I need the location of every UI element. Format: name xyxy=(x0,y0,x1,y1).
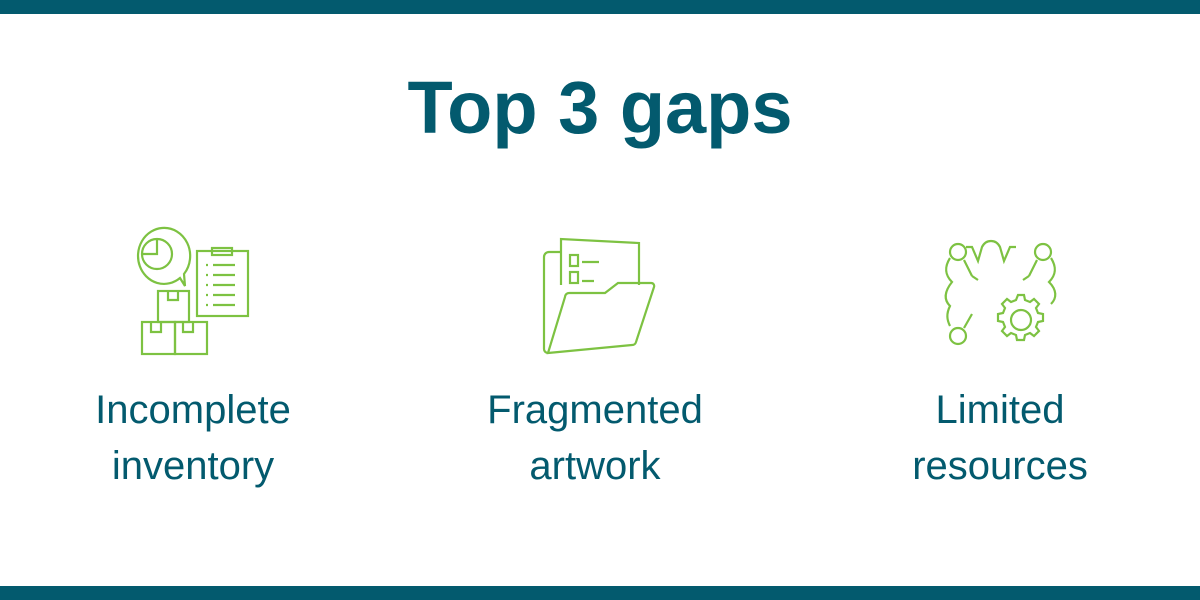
bottom bar xyxy=(0,586,1200,600)
label: incomplete inventory: inventory xyxy=(112,444,274,488)
label: incomplete inventory: Incomplete xyxy=(95,388,291,432)
icon: inventory xyxy=(138,228,248,354)
label: limited resources xyxy=(912,388,1088,488)
label: fragmented artwork xyxy=(487,388,703,488)
icon: folder xyxy=(544,239,654,353)
title: Top 3 gaps xyxy=(407,66,793,149)
label: limited resources: Limited xyxy=(936,388,1064,432)
label: fragmented artwork: Fragmented xyxy=(487,388,703,432)
label: fragmented artwork: artwork xyxy=(529,444,661,488)
icon: resources xyxy=(946,241,1055,344)
top bar xyxy=(0,0,1200,14)
label: limited resources: resources xyxy=(912,444,1088,488)
label: incomplete inventory xyxy=(95,388,291,488)
